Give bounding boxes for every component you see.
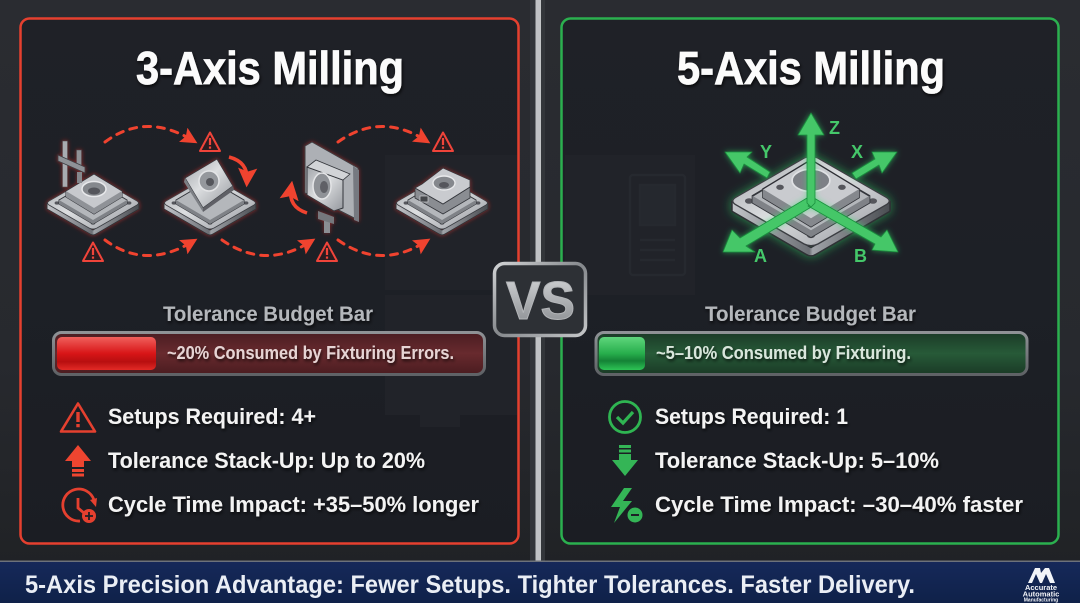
stat list: 3-axis bbox=[61, 404, 479, 523]
VS text: VS bbox=[506, 271, 575, 331]
tolerance bar: 5-10 percent bbox=[596, 332, 1027, 374]
part on plate: setup 1 bbox=[47, 141, 139, 235]
panel frame: 5-axis bbox=[562, 18, 1058, 544]
stepped plate bbox=[732, 156, 890, 256]
label: Y: Y bbox=[760, 142, 772, 162]
stat: tolerance right: Tolerance Stack-Up: 5–10% bbox=[655, 448, 939, 473]
heading: 3-Axis Milling: 3-Axis Milling bbox=[136, 42, 404, 94]
arrow: Z bbox=[798, 113, 824, 207]
logo wordmark line 2: Automatic bbox=[1023, 590, 1059, 598]
label: tolerance budget bar right: Tolerance Budget Bar bbox=[705, 303, 916, 326]
panel frame: 3-axis bbox=[20, 18, 518, 544]
arrow: X bbox=[852, 152, 897, 179]
tolerance bar: 20 percent bbox=[54, 332, 484, 374]
center divider bbox=[530, 0, 545, 561]
rotation arrow: left bbox=[291, 188, 307, 213]
stat list: 5-axis bbox=[610, 402, 1023, 523]
icon: check circle bbox=[610, 402, 640, 432]
machine watermark: left bbox=[385, 155, 517, 427]
part finished: setup 4 bbox=[396, 168, 488, 235]
bar caption right: ~5–10% Consumed by Fixturing. bbox=[656, 343, 911, 363]
stat: cycle time right: Cycle Time Impact: –30–40% faster bbox=[655, 492, 1023, 517]
logo mark bbox=[1028, 568, 1055, 583]
diagram: five axis part bbox=[723, 113, 898, 266]
stat: tolerance: Tolerance Stack-Up: Up to 20% bbox=[108, 448, 425, 473]
icon mark: exclamation bbox=[76, 412, 80, 427]
VS badge bbox=[494, 264, 586, 336]
bar track bbox=[54, 332, 484, 374]
stat: cycle time: Cycle Time Impact: +35–50% longer bbox=[108, 492, 479, 517]
part vertical: setup 3 bbox=[305, 142, 359, 233]
panel: 5-axis milling bbox=[562, 18, 1058, 544]
logo bbox=[1023, 568, 1059, 603]
panel: 3-axis milling bbox=[20, 18, 518, 544]
icon: lightning minus bbox=[611, 488, 642, 523]
icon: warning bbox=[61, 404, 95, 432]
axis arrows bbox=[723, 113, 898, 252]
label: X: X bbox=[851, 142, 863, 162]
part tilted: setup 2 bbox=[164, 159, 256, 235]
label: A: A bbox=[754, 246, 767, 266]
icon: clock plus bbox=[63, 489, 97, 523]
stat: setups: Setups Required: 4+ bbox=[108, 404, 316, 429]
arrow: A bbox=[723, 198, 813, 252]
diagram: four setup workflow bbox=[47, 126, 488, 261]
footer text: 5-Axis Precision Advantage: Fewer Setups. Tighter Tolerances. Faster Delivery. bbox=[25, 571, 915, 599]
logo wordmark: Accurate bbox=[1025, 583, 1057, 592]
dashed flow arrows bbox=[105, 126, 425, 256]
bar fill bbox=[57, 337, 156, 370]
bar caption: ~20% Consumed by Fixturing Errors. bbox=[167, 343, 454, 363]
machine watermark: right bbox=[565, 155, 695, 295]
icon: down arrow bbox=[612, 445, 638, 476]
warning icons bbox=[83, 132, 453, 261]
bar track right bbox=[596, 332, 1027, 374]
label: Z: Z bbox=[829, 118, 840, 138]
arrow: B bbox=[808, 198, 898, 252]
label: tolerance budget bar: Tolerance Budget Bar bbox=[163, 303, 373, 326]
rotation arrow: right bbox=[229, 157, 247, 180]
bar fill right bbox=[599, 337, 645, 370]
axis labels bbox=[754, 118, 867, 266]
heading: 5-Axis Milling: 5-Axis Milling bbox=[677, 42, 945, 94]
footer top edge bbox=[0, 560, 1080, 562]
arrow: Y bbox=[725, 152, 770, 178]
footer banner bbox=[0, 560, 1080, 603]
stat: setups right: Setups Required: 1 bbox=[655, 404, 848, 429]
icon: up arrow bbox=[65, 445, 91, 476]
label: B: B bbox=[854, 246, 867, 266]
